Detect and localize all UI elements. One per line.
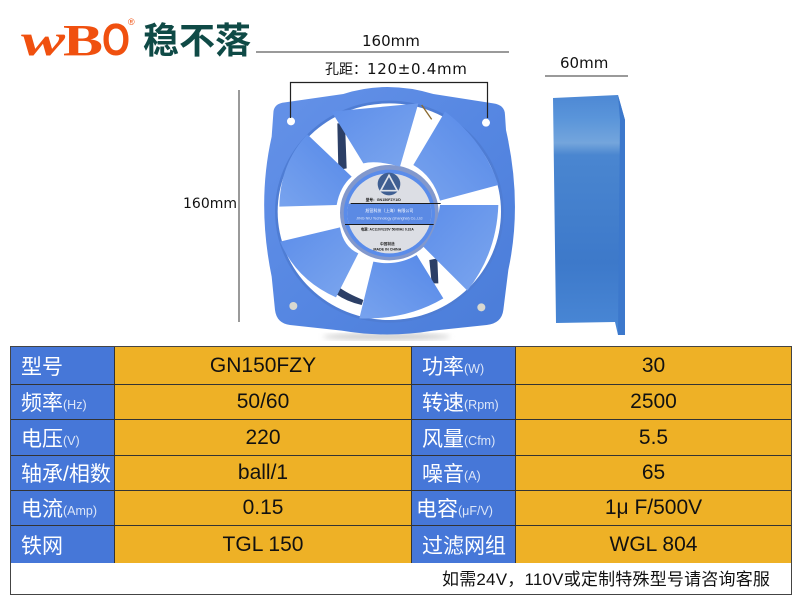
fan front view: JING NIU Technology (shanghai) Co.,Ltd bbox=[356, 217, 422, 221]
grille label bbox=[11, 526, 114, 563]
current label: 电流 bbox=[21, 498, 63, 521]
frequency label: (Hz) bbox=[63, 398, 87, 412]
noise label bbox=[412, 456, 515, 490]
model value: GN150FZY bbox=[210, 354, 316, 376]
voltage label: (V) bbox=[63, 434, 80, 448]
hole spacing label: 孔距：120±0.4mm bbox=[325, 60, 468, 78]
filter label bbox=[412, 526, 515, 563]
voltage value bbox=[115, 420, 411, 455]
frequency value: 50/60 bbox=[237, 390, 289, 413]
power value bbox=[516, 347, 791, 384]
grille label: 铁网 bbox=[21, 534, 63, 558]
frequency label bbox=[11, 385, 114, 419]
airflow value bbox=[516, 420, 791, 455]
bearing label bbox=[11, 456, 114, 490]
fan front view: 中国制造 bbox=[380, 241, 395, 247]
current label: (Amp) bbox=[63, 504, 97, 518]
filter value bbox=[516, 526, 791, 563]
speed label bbox=[412, 385, 515, 419]
bearing value: ball/1 bbox=[238, 461, 288, 484]
speed value: 2500 bbox=[630, 390, 677, 413]
airflow value: 5.5 bbox=[639, 426, 668, 448]
fan front view bbox=[264, 87, 515, 341]
current label bbox=[11, 491, 114, 525]
width dimension line bbox=[256, 51, 509, 53]
height label: 160mm bbox=[183, 196, 237, 212]
depth dimension line bbox=[545, 75, 628, 77]
voltage value: 220 bbox=[245, 426, 281, 448]
height dimension line bbox=[238, 90, 240, 322]
fan front view: 电源: AC110V/220V 50/60Hz 0.32A bbox=[361, 227, 414, 232]
power label: (W) bbox=[464, 362, 484, 376]
filter label: 过滤网组 bbox=[422, 534, 506, 558]
airflow label: 风量 bbox=[422, 428, 464, 450]
fan front view: MADE IN CHINA bbox=[373, 248, 402, 252]
bearing label: 轴承/相数 bbox=[21, 463, 111, 486]
hole spacing bracket bbox=[290, 82, 488, 118]
grille value: TGL 150 bbox=[223, 532, 303, 556]
power label bbox=[412, 347, 515, 384]
power label: 功率 bbox=[422, 356, 464, 378]
speed value bbox=[516, 385, 791, 419]
airflow label: (Cfm) bbox=[464, 434, 495, 448]
bearing value bbox=[115, 456, 411, 490]
voltage label bbox=[11, 420, 114, 455]
noise label: 噪音 bbox=[422, 463, 464, 486]
frequency value bbox=[115, 385, 411, 419]
fan front view: 型号：GN150FZY1/D bbox=[366, 197, 401, 202]
voltage label: 电压 bbox=[21, 428, 63, 450]
fan front view: 旭钮科技（上海）有限公司 bbox=[365, 207, 413, 214]
noise value: 65 bbox=[642, 461, 665, 484]
capacitor value bbox=[516, 491, 791, 525]
capacitor label bbox=[412, 491, 515, 525]
speed label: 转速 bbox=[422, 392, 464, 415]
filter value: WGL 804 bbox=[610, 532, 697, 556]
current value bbox=[115, 491, 411, 525]
frequency label: 频率 bbox=[21, 392, 63, 415]
capacitor label: 电容 bbox=[416, 498, 458, 521]
current value: 0.15 bbox=[243, 496, 283, 519]
noise label: (A) bbox=[464, 469, 481, 483]
power value: 30 bbox=[642, 354, 665, 376]
capacitor value: 1μ F/500V bbox=[605, 496, 702, 519]
model value bbox=[115, 347, 411, 384]
fan side view bbox=[553, 95, 625, 335]
capacitor label: (μF/V) bbox=[458, 504, 493, 518]
speed label: (Rpm) bbox=[464, 398, 499, 412]
spec table bbox=[10, 346, 792, 595]
brand logo bbox=[21, 14, 135, 62]
model label bbox=[11, 347, 114, 384]
airflow label bbox=[412, 420, 515, 455]
width label: 160mm bbox=[362, 32, 420, 50]
brand logo: ® bbox=[128, 17, 135, 27]
depth label: 60mm bbox=[560, 54, 608, 72]
grille value bbox=[115, 526, 411, 563]
brand name: 稳不落 bbox=[143, 12, 251, 64]
noise value bbox=[516, 456, 791, 490]
model label: 型号 bbox=[21, 356, 63, 378]
footer note: 如需24V，110V或定制特殊型号请咨询客服 bbox=[442, 570, 770, 589]
